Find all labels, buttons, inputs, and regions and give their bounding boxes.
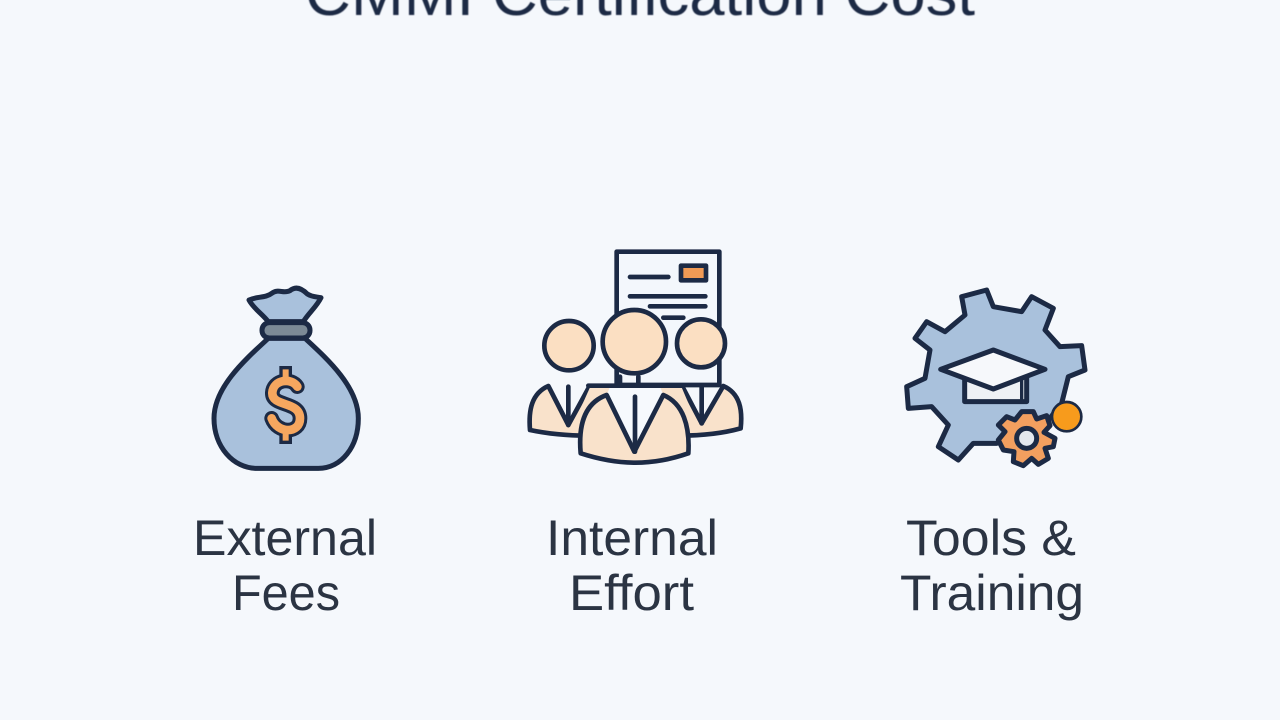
icon: money bag <box>214 288 358 468</box>
icon: team with document <box>530 252 741 463</box>
label: Internal Effort: Internal <box>546 510 718 566</box>
centre person <box>578 310 693 463</box>
label: Tools & Training: Training <box>900 565 1084 621</box>
icon: gear with graduation cap <box>907 290 1085 466</box>
graduation cap <box>941 350 1045 402</box>
label: External Fees: Fees <box>232 565 340 621</box>
label: External Fees <box>193 510 377 621</box>
label: Internal Effort: Effort <box>569 565 694 621</box>
right person <box>660 319 741 436</box>
label: Tools & Training <box>900 510 1084 621</box>
orange dot <box>1052 402 1081 431</box>
small gear <box>998 412 1055 466</box>
label: Internal Effort <box>546 510 718 621</box>
left person <box>530 321 610 436</box>
label: External Fees: External <box>193 510 377 566</box>
label: Tools & Training: Tools & <box>906 510 1076 566</box>
document <box>617 252 719 385</box>
